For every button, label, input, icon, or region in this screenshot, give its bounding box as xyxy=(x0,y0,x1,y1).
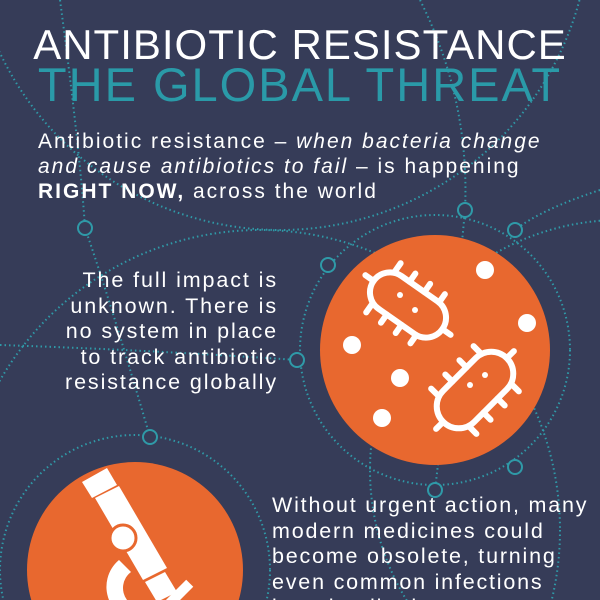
text: impact unknown xyxy=(65,268,278,394)
text: impact unknown: no system in place xyxy=(66,319,278,343)
title: ANTIBIOTIC RESISTANCE xyxy=(33,21,567,68)
intro text: RIGHT NOW, across the world xyxy=(38,180,378,203)
intro text: and cause antibiotics to fail – is happening xyxy=(38,155,521,178)
text: impact unknown: unknown. There is xyxy=(70,294,278,318)
text: modern medicines: modern medicines could xyxy=(272,518,545,542)
intro text xyxy=(38,130,542,203)
icon: bacteria circle xyxy=(320,235,550,465)
text: impact unknown: to track antibiotic xyxy=(81,344,278,368)
icon: microscope circle xyxy=(27,462,243,600)
title xyxy=(33,21,567,111)
text: impact unknown: The full impact is xyxy=(82,268,278,292)
text: modern medicines xyxy=(272,493,588,600)
text: impact unknown: resistance globally xyxy=(65,370,278,394)
text: modern medicines: become obsolete, turning xyxy=(272,544,557,568)
text: modern medicines: even common infections xyxy=(272,570,543,594)
text: modern medicines: Without urgent action, many xyxy=(272,493,588,517)
intro text: Antibiotic resistance – when bacteria change xyxy=(38,130,542,153)
title: THE GLOBAL THREAT xyxy=(38,58,562,111)
